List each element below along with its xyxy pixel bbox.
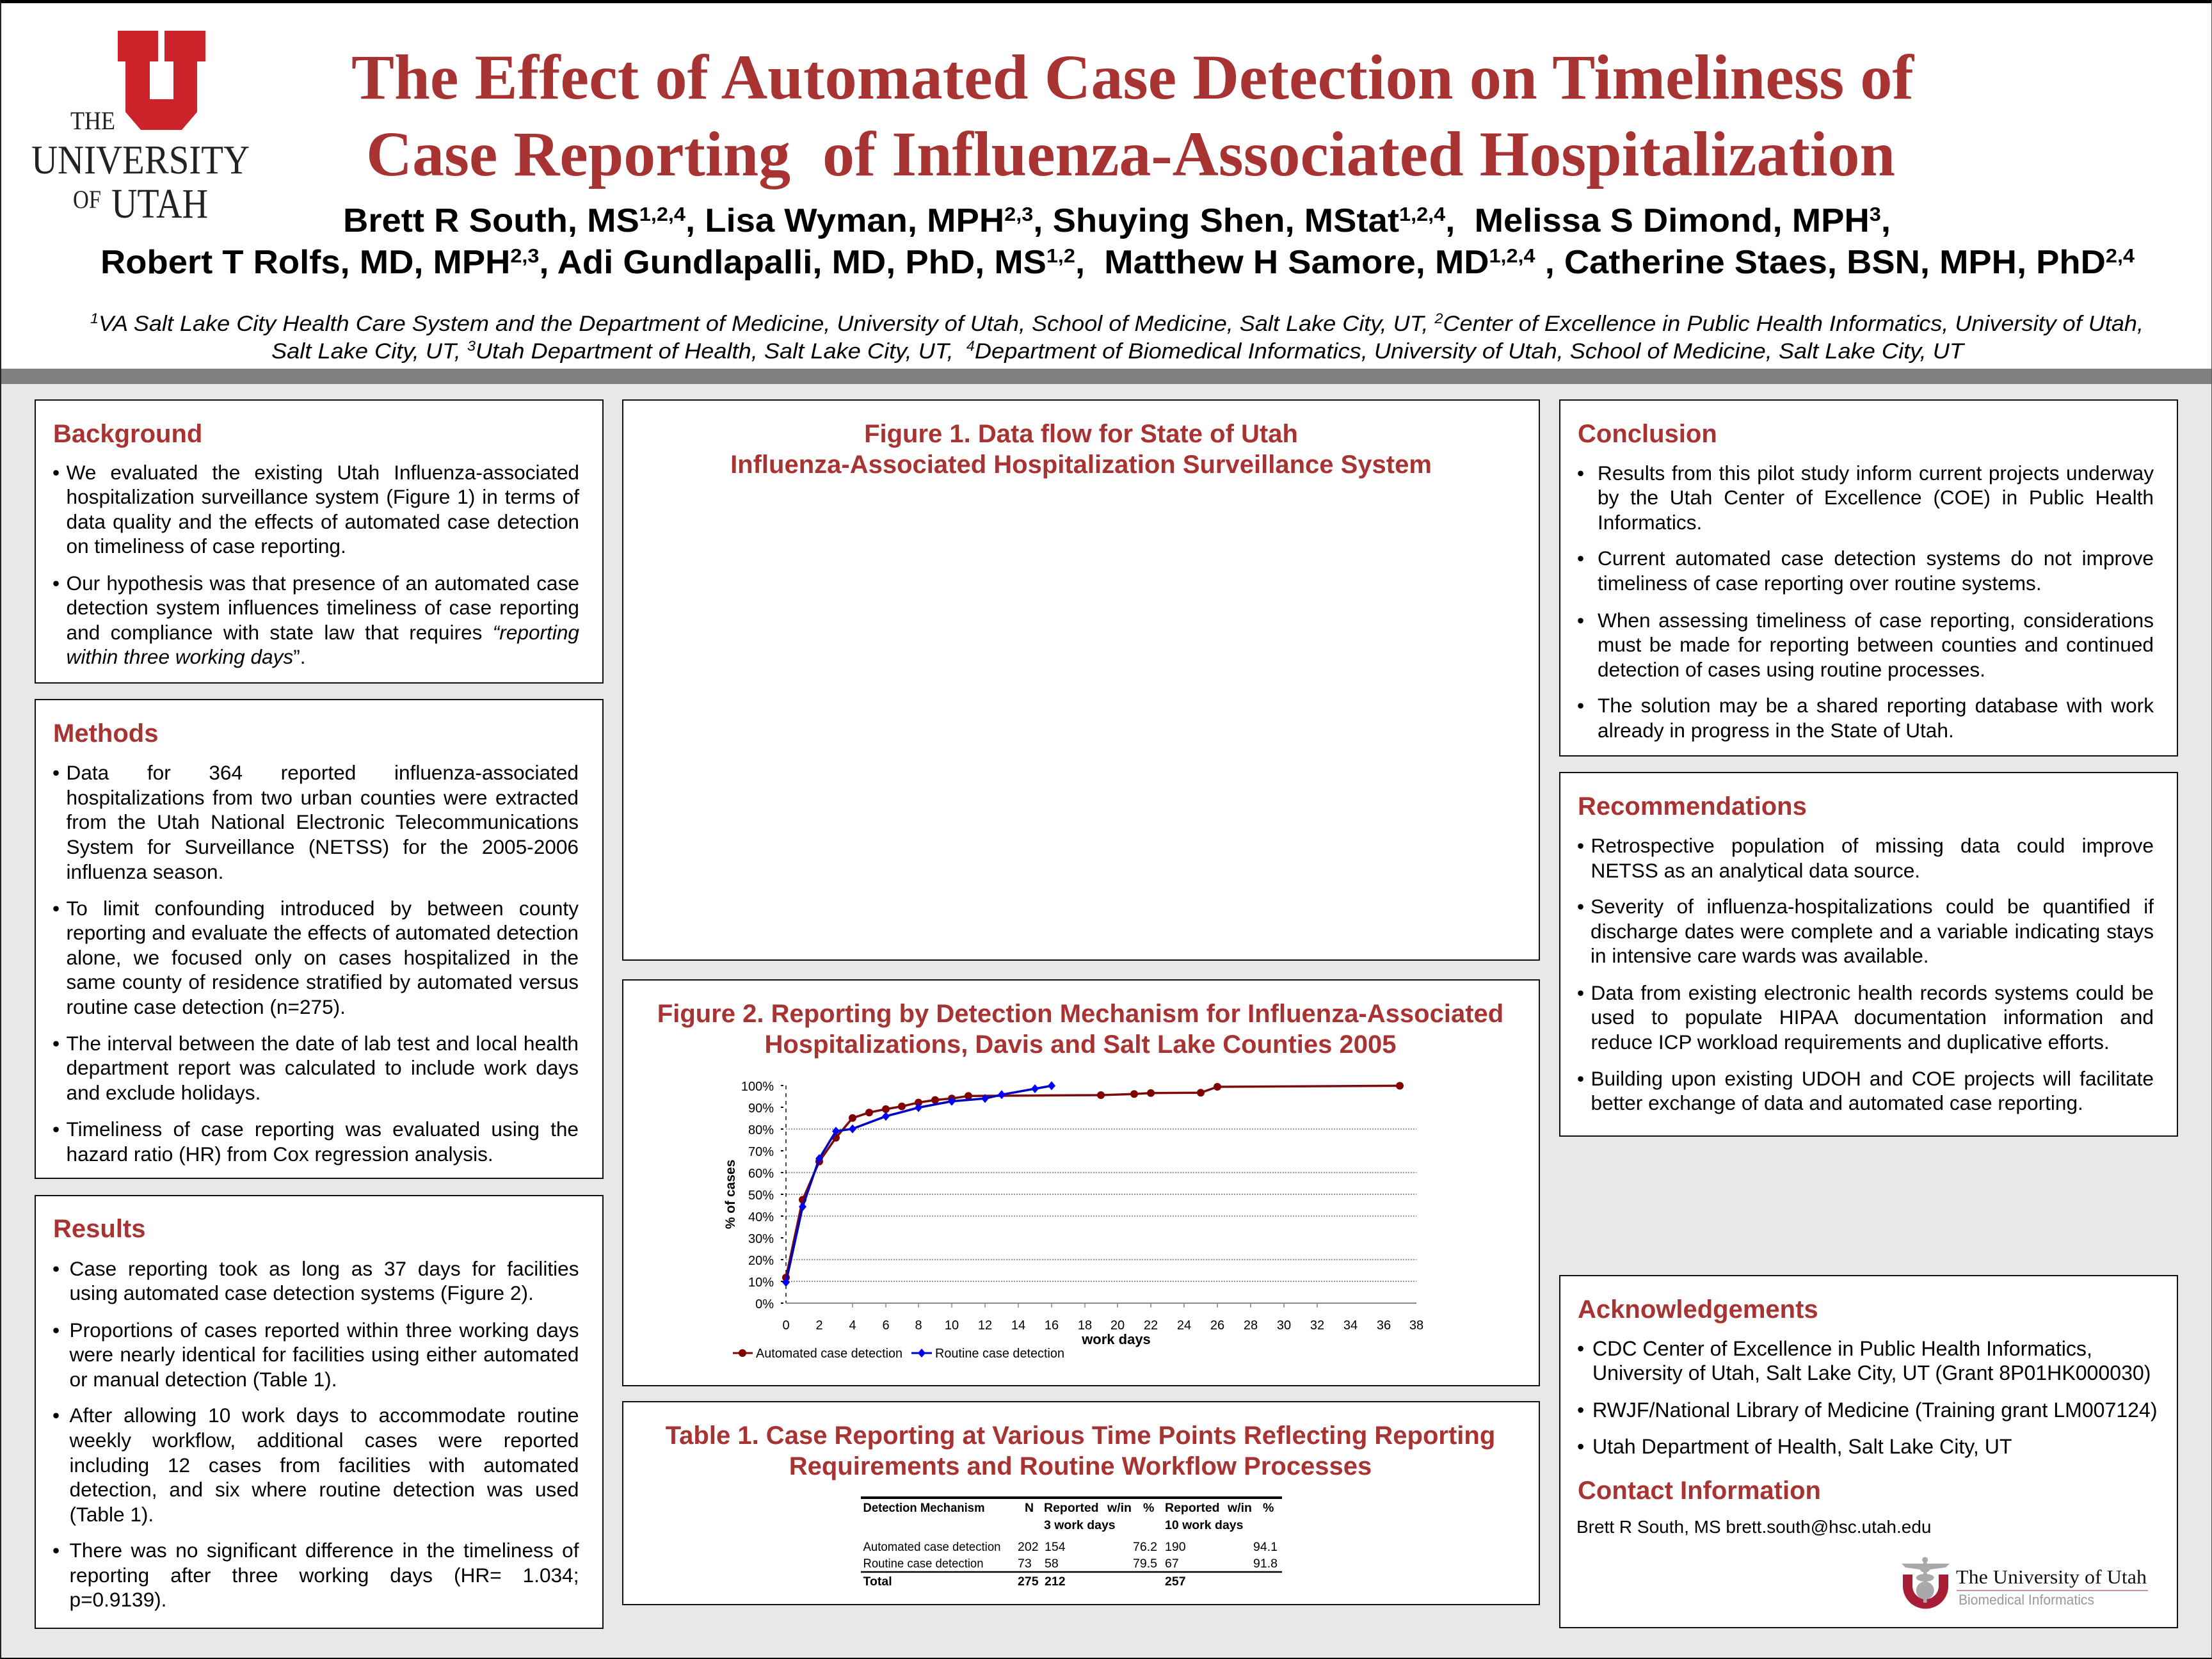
y axis labels: 0% [755,1297,774,1311]
authors: , Melissa S Dimond, MPH [1445,202,1870,239]
heading: background: Background [53,420,202,448]
text block: results bullet 3: weekly workflow, additional cases were reported [69,1429,579,1452]
x axis labels: 32 [1310,1318,1324,1333]
y axis title: % of cases [723,1160,738,1229]
y axis labels: 100% [741,1080,774,1094]
text block: conclusion bullet 1: Informatics. [1598,511,1702,534]
x axis labels: 20 [1110,1318,1125,1333]
heading: figure 2 title [657,1000,1503,1059]
table: case reporting by detection mechanism: 190 [1165,1540,1186,1554]
affiliations: 1 [90,310,99,326]
panel: methods [35,699,604,1179]
table: case reporting by detection mechanism: 67 [1165,1557,1179,1571]
text block: recommendations bullet 4: Building upon existing UDOH and COE projects will facilitate [1591,1067,2154,1090]
y axis labels [741,1080,774,1311]
text block: results bullet 3: including 12 cases from facilities with automated [69,1454,579,1477]
table: case reporting by detection mechanism: Reported [1044,1501,1099,1515]
authors: , Matthew H Samore, MD [1075,244,1489,281]
table: case reporting by detection mechanism: w/in [1107,1501,1132,1515]
text block: methods bullet 4: Timeliness of case reporting was evaluated using the [67,1118,579,1141]
text block: methods bullet 2 [52,897,579,1018]
text block: recommendations bullet 4: • [1577,1067,1584,1090]
authors: 2,4 [2106,244,2135,267]
text block: recommendations bullet 3: Data from existing electronic health records systems could be [1591,981,2154,1004]
y axis labels: 80% [748,1123,774,1137]
series: routine case detection [782,1081,1055,1286]
text block: results bullet 2: or manual detection (Table 1). [69,1368,337,1391]
panel: background [35,399,604,684]
table: case reporting by detection mechanism: 154 [1045,1540,1066,1554]
heading: conclusion: Conclusion [1578,420,1717,448]
table: case reporting by detection mechanism [861,1496,1282,1589]
heading: table 1 title [666,1422,1495,1480]
text block: acknowledgement 1: CDC Center of Excellence in Public Health Informatics, [1592,1336,2092,1359]
logo: The University of Utah block U: THE [70,106,115,135]
table: case reporting by detection mechanism: Reported [1165,1501,1220,1515]
y axis labels: 50% [748,1189,774,1203]
panel: results [35,1195,604,1629]
text block: results bullet 4: There was no significant difference in the timeliness of [69,1539,579,1562]
authors: 2,3 [1004,203,1033,225]
text block: acknowledgement 1: • [1577,1336,1584,1359]
text block: methods bullet 4 [52,1118,579,1166]
x axis labels: 0 [782,1318,790,1333]
text block: background bullet 2: detection system influences timeliness of case reporting [67,596,579,619]
text block: conclusion bullet 3: When assessing timeliness of case reporting, considerations [1598,609,2154,632]
text block: conclusion bullet 1: by the Utah Center of Excellence (COE) in Public Health [1598,486,2154,509]
logo: The University of Utah block U [31,31,250,227]
text block: background bullet 1: hospitalization surveillance system (Figure 1) in terms of [67,485,579,508]
table: case reporting by detection mechanism: Automated case detection [863,1540,1001,1554]
table: case reporting by detection mechanism: w/in [1227,1501,1252,1515]
text block: methods bullet 2: • [52,897,60,920]
text block: methods bullet 3: and exclude holidays. [67,1081,260,1104]
text block: methods bullet 1: influenza season. [67,860,223,883]
table: case reporting by detection mechanism: 212 [1045,1575,1066,1589]
text block: recommendations bullet 2: • [1577,895,1584,918]
text block: conclusion bullet 2: Current automated case detection systems do not improve [1598,547,2154,570]
table: case reporting by detection mechanism: 10 work days [1165,1518,1244,1532]
text block: results bullet 4 [52,1539,579,1611]
x axis labels: 28 [1244,1318,1258,1333]
text block: results bullet 1: using automated case detection systems (Figure 2). [69,1281,534,1304]
text block: results bullet 2: Proportions of cases reported within three working days [69,1318,579,1342]
y axis labels: 70% [748,1145,774,1159]
table: case reporting by detection mechanism: 91.8 [1253,1557,1278,1571]
heading: contact information: Contact Information [1578,1476,1821,1504]
y axis labels: 60% [748,1167,774,1181]
table: case reporting by detection mechanism: Total [863,1575,892,1589]
text block: conclusion bullet 1: • [1577,461,1584,484]
text block: methods bullet 3: • [52,1032,60,1055]
authors: 1,2,4 [639,203,686,225]
y axis labels: 20% [748,1254,774,1268]
affiliations: Utah Department of Health, Salt Lake City, UT, [476,339,966,364]
table: case reporting by detection mechanism: N [1025,1501,1034,1515]
legend: Automated case detection [756,1347,902,1361]
text block: results bullet 4: • [52,1539,60,1562]
text block: results bullet 1 [52,1257,579,1304]
table: case reporting by detection mechanism: 73 [1018,1557,1032,1571]
table: case reporting by detection mechanism: 202 [1018,1540,1039,1554]
text block: acknowledgement 2: RWJF/National Library of Medicine (Training grant LM007124) [1592,1399,2158,1422]
text block: conclusion bullet 2: timeliness of case reporting over routine systems. [1598,572,2042,595]
text block: background bullet 2: and compliance with state law that requires “reporting [67,621,579,644]
text block: background bullet 1: on timeliness of case reporting. [67,534,346,557]
x axis labels: 34 [1343,1318,1358,1333]
y axis labels: 30% [748,1232,774,1246]
x axis labels: 16 [1045,1318,1059,1333]
text block: recommendations bullet 3: used to populate HIPAA documentation information and [1591,1006,2154,1029]
header banner [0,0,2212,369]
heading: figure 1 title: Figure 1. Data flow for State of Utah [864,420,1298,448]
text block: conclusion bullet 4: • [1577,694,1584,717]
affiliations: Department of Biomedical Informatics, University of Utah, School of Medicine, Salt Lake City, UT [975,339,1965,364]
table: case reporting by detection mechanism: 79.5 [1133,1557,1157,1571]
logo: University of Utah Biomedical Informatics [1898,1557,2170,1614]
text block: acknowledgement 1 [1577,1336,2163,1386]
text block: recommendations bullet 3: • [1577,981,1584,1004]
text block: background bullet 2 [52,572,579,668]
logo: The University of Utah block U: UNIVERSITY [31,138,250,182]
authors: 1,2 [1046,244,1075,267]
text block: results bullet 3: • [52,1404,60,1427]
text block: results bullet 1: • [52,1257,60,1280]
series: automated case detection [782,1082,1404,1281]
x axis labels: 4 [849,1318,856,1333]
text block: results bullet 3 [52,1404,579,1526]
x axis labels: 2 [815,1318,823,1333]
text block: acknowledgement 3: Utah Department of Health, Salt Lake City, UT [1592,1435,2012,1458]
text block: conclusion bullet 3: detection of cases using routine processes. [1598,658,1985,681]
heading: results: Results [53,1215,146,1243]
x axis labels: 22 [1144,1318,1158,1333]
authors: 3 [1870,203,1881,225]
table: case reporting by detection mechanism: 3 work days [1044,1518,1116,1532]
table: case reporting by detection mechanism: 257 [1165,1575,1186,1589]
text block: background bullet 1: We evaluated the existing Utah Influenza-associated [67,461,579,484]
text block: methods bullet 2: same county of residence stratified by automated versus [67,970,579,993]
x axis labels: 6 [882,1318,890,1333]
text block: background bullet 1: data quality and the effects of automated case detection [67,510,579,533]
authors: , Catherine Staes, BSN, MPH, PhD [1535,244,2106,281]
text block: results bullet 4: p=0.9139). [69,1588,166,1611]
x axis labels: 30 [1277,1318,1291,1333]
affiliations: Salt Lake City, UT, [271,339,449,364]
table: case reporting by detection mechanism: % [1263,1501,1274,1515]
authors: , [1881,202,1891,239]
text block: recommendations bullet 3 [1577,981,2154,1054]
text block: conclusion bullet 2 [1577,547,2154,595]
heading: table 1 title: Table 1. Case Reporting at Various Time Points Reflecting Reporting [666,1422,1495,1450]
x axis labels: 14 [1011,1318,1025,1333]
text block: methods bullet 1 [52,761,579,883]
text block: conclusion bullet 1 [1577,461,2154,534]
x axis labels: 24 [1177,1318,1191,1333]
authors: , Lisa Wyman, MPH [685,202,1004,239]
text block: conclusion bullet 4 [1577,694,2154,742]
authors: 1,2,4 [1399,203,1446,225]
table: case reporting by detection mechanism: 76.2 [1133,1540,1157,1554]
panel: figure 1 [622,399,1540,961]
text block: conclusion bullet 4: The solution may be a shared reporting database with work [1598,694,2154,717]
text block: recommendations bullet 2 [1577,895,2154,967]
affiliations: Center of Excellence in Public Health Informatics, University of Utah, [1443,312,2144,336]
text block: recommendations bullet 2: in intensive care wards was available. [1591,944,1929,967]
affiliations [90,310,2144,364]
text block: methods bullet 2: alone, we focused only on cases hospitalized in the [67,946,579,969]
legend: Routine case detection [935,1347,1064,1361]
text block: results bullet 3: (Table 1). [69,1503,154,1526]
text block: recommendations bullet 2: Severity of influenza-hospitalizations could be quantified if [1591,895,2154,918]
line chart: cumulative percent of cases by work days [723,1080,1423,1361]
text block: conclusion bullet 3: • [1577,609,1584,632]
authors: Brett R South, MS [343,202,626,239]
affiliations: 3 [467,338,476,354]
text block: acknowledgement 1: University of Utah, Salt Lake City, UT (Grant 8P01HK000030) [1592,1361,2151,1384]
x axis labels: 8 [915,1318,922,1333]
text block: results bullet 2 [52,1318,579,1391]
text block: recommendations bullet 1 [1577,834,2154,882]
panel: table 1 [622,1401,1540,1605]
text block: acknowledgement 3 [1577,1434,2163,1459]
title: The Effect of Automated Case Detection on Timeliness of [351,42,1915,113]
x axis labels: 18 [1078,1318,1092,1333]
x axis labels: 10 [945,1318,959,1333]
text block: methods bullet 3: The interval between the date of lab test and local health [67,1032,579,1055]
panel: acknowledgements and contact [1559,1275,2178,1628]
table: case reporting by detection mechanism: Routine case detection [863,1557,983,1571]
text block: background bullet 2: Our hypothesis was that presence of an automated case [67,572,579,595]
text block: recommendations bullet 3: reduce ICP workload requirements and duplicative efforts. [1591,1030,2110,1054]
text block: acknowledgement 3: • [1577,1435,1584,1458]
text block: background bullet 2: • [52,572,60,595]
legend [733,1347,1064,1361]
heading: recommendations: Recommendations [1578,792,1807,821]
text block: background bullet 2: within three working days”. [67,645,306,668]
table: case reporting by detection mechanism: 275 [1018,1575,1039,1589]
x axis labels: 26 [1210,1318,1224,1333]
authors: Robert T Rolfs, MD, MPH [100,244,492,281]
text block: conclusion bullet 3 [1577,609,2154,681]
heading: figure 1 title: Influenza-Associated Hospitalization Surveillance System [730,451,1432,479]
x axis labels [782,1318,1423,1333]
y axis labels: 40% [748,1210,774,1224]
text block: recommendations bullet 1: Retrospective population of missing data could improve [1591,834,2154,857]
text block: methods bullet 2: routine case detection (n=275). [67,995,346,1018]
text block: methods bullet 1: • [52,761,60,784]
text block: recommendations bullet 1: NETSS as an analytical data source. [1591,859,1920,882]
authors: , Adi Gundlapalli, MD, PhD, MS [539,244,1046,281]
x axis labels: 36 [1377,1318,1391,1333]
text block: recommendations bullet 1: • [1577,834,1584,857]
text block: methods bullet 1: Data for 364 reported influenza-associated [67,761,579,784]
text block: conclusion bullet 2: • [1577,547,1584,570]
logo: The University of Utah block U: UTAH [111,180,208,227]
affiliations: 4 [966,338,975,354]
text block: methods bullet 2: To limit confounding introduced by between county [67,897,579,920]
text block: recommendations bullet 2: discharge dates were complete and a variable indicating stays [1591,920,2154,943]
table: case reporting by detection mechanism: 58 [1045,1557,1059,1571]
text block: results bullet 4: reporting after three working days (HR= 1.034; [69,1564,579,1587]
text block: recommendations bullet 4: better exchange of data and automated case reporting. [1591,1091,2083,1114]
text block: conclusion bullet 1: Results from this pilot study inform current projects underway [1598,461,2154,484]
table: case reporting by detection mechanism: % [1143,1501,1154,1515]
heading: methods: Methods [53,719,158,748]
panel: recommendations [1559,772,2178,1137]
text block: conclusion bullet 3: must be made for reporting between counties and continued [1598,633,2154,656]
text block: background bullet 1: • [52,461,60,484]
authors: 2,3 [510,244,539,267]
text block: contact: Brett R South, MS brett.south@hsc.utah.edu [1576,1517,1932,1537]
affiliations: VA Salt Lake City Health Care System and the Department of Medicine, University of Utah, School of Medicine, Salt Lake City, UT, [99,312,1435,336]
text block: methods bullet 2: reporting and evaluate the effects of automated detection [67,921,579,944]
text block: methods bullet 3: department report was calculated to include work days [67,1056,579,1079]
y axis labels: 90% [748,1102,774,1116]
text block: results bullet 3: After allowing 10 work days to accommodate routine [69,1404,579,1427]
text block: recommendations bullet 4 [1577,1066,2154,1116]
table: case reporting by detection mechanism: Detection Mechanism [863,1501,984,1515]
heading: figure 2 title: Hospitalizations, Davis and Salt Lake Counties 2005 [764,1030,1396,1059]
title: Case Reporting of Influenza-Associated Hospitalization [366,118,1895,189]
text block: methods bullet 4: hazard ratio (HR) from Cox regression analysis. [67,1142,493,1166]
table: case reporting by detection mechanism: 94.1 [1253,1540,1278,1554]
heading: acknowledgements: Acknowledgements [1578,1295,1818,1324]
text block: methods bullet 4: • [52,1118,60,1141]
x axis title: work days [1081,1331,1151,1347]
x axis labels: 12 [978,1318,992,1333]
text block: results bullet 2: were nearly identical for facilities using either automated [69,1343,579,1366]
logo: University of Utah Biomedical Informatics: Biomedical Informatics [1959,1592,2094,1608]
authors: 1,2,4 [1489,244,1535,267]
x axis labels: 38 [1409,1318,1423,1333]
text block: acknowledgement 2: • [1577,1399,1584,1422]
affiliations: 2 [1434,310,1443,326]
text block: methods bullet 1: hospitalizations from two urban counties were extracted [67,786,579,809]
text block: conclusion bullet 4: already in progress in the State of Utah. [1598,719,1954,742]
text block: methods bullet 1: from the Utah National Electronic Telecommunications [67,810,579,833]
title [351,42,1915,189]
heading: figure 2 title: Figure 2. Reporting by Detection Mechanism for Influenza-Associated [657,1000,1503,1028]
heading: figure 1 title [730,420,1432,479]
text block: results bullet 1: Case reporting took as long as 37 days for facilities [69,1257,579,1280]
panel: figure 2 [622,979,1540,1386]
authors: , Shuying Shen, MStat [1033,202,1399,239]
text block: methods bullet 1: System for Surveillance (NETSS) for the 2005-2006 [67,835,579,858]
logo: University of Utah Biomedical Informatics: The University of Utah [1956,1566,2147,1588]
text block: methods bullet 3 [52,1032,579,1104]
logo: The University of Utah block U: OF [73,185,101,214]
authors [100,202,2135,281]
text block: results bullet 3: detection, and six where routine detection was used [69,1478,579,1501]
y axis labels: 10% [748,1276,774,1290]
text block: background bullet 1 [52,461,580,557]
text block: results bullet 2: • [52,1318,60,1342]
heading: table 1 title: Requirements and Routine Workflow Processes [789,1452,1372,1480]
panel: conclusion [1559,399,2178,757]
